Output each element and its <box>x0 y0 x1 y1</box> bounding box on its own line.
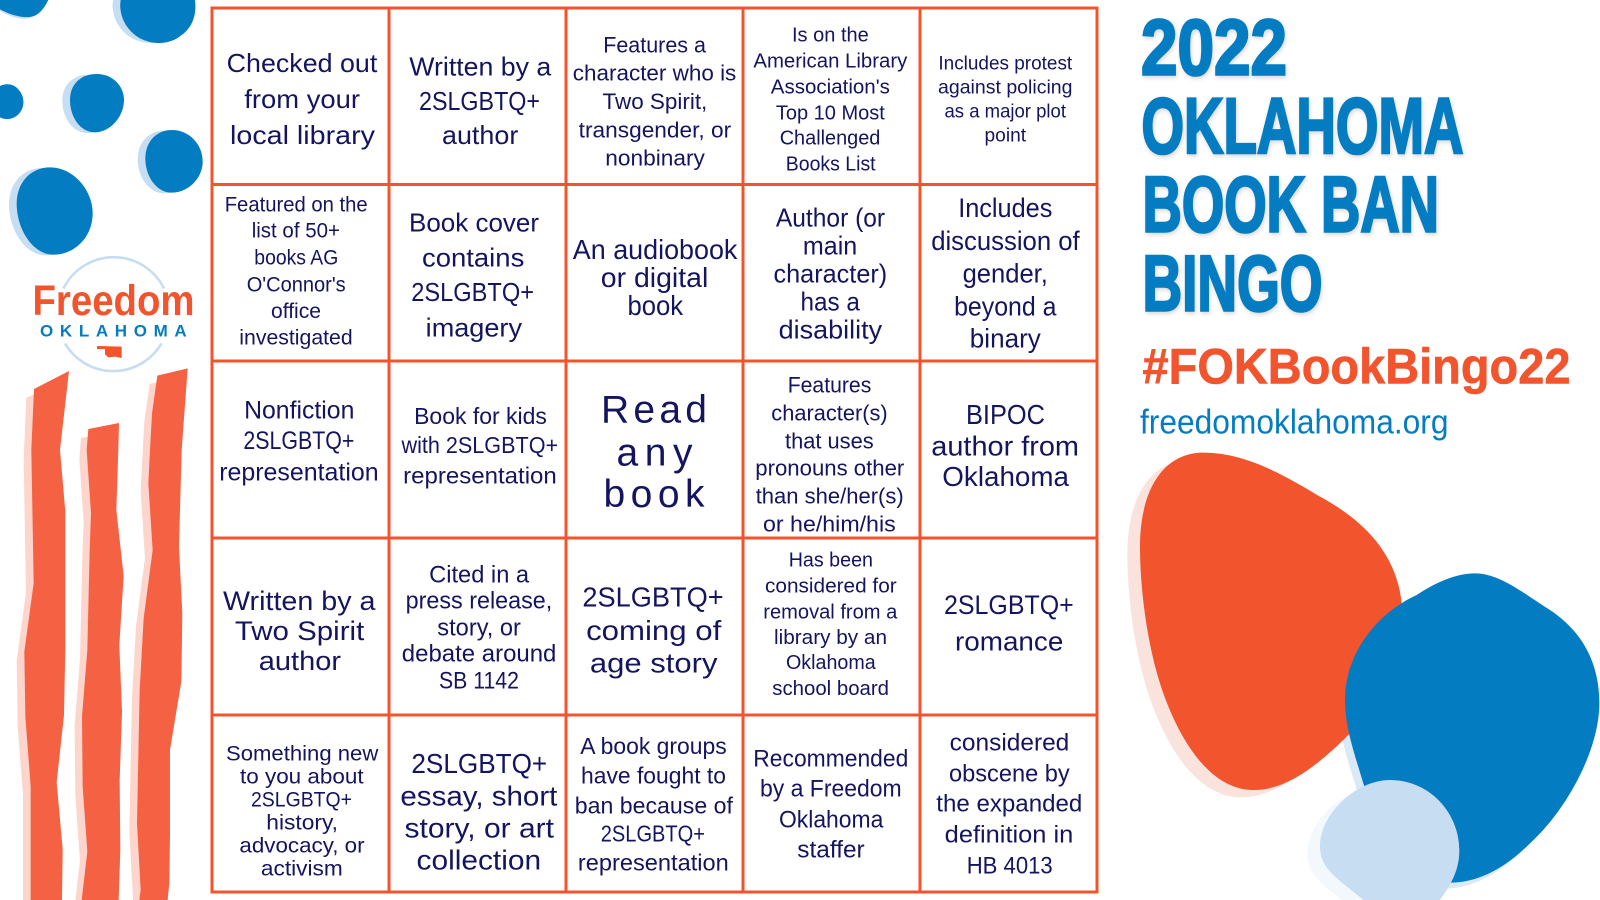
cell: HB 4013: considered <box>950 730 1069 757</box>
cell: gender beyond a binary: beyond a <box>954 291 1057 321</box>
cell: something new <box>226 741 379 880</box>
cell: disability: Author (or <box>776 203 885 233</box>
cell: ALA top 10 most challenged <box>753 24 908 175</box>
cell: recommended by staffer: Recommended <box>753 745 908 772</box>
cell: essay, short story, or art: 2SLGBTQ+ <box>411 748 547 779</box>
cell: checked out from your local library: Checked out <box>227 48 378 78</box>
cell: protest against policing: as a major plot <box>944 101 1067 123</box>
cell: AG O'Connor list: investigated <box>239 326 353 350</box>
cell: AG O'Connor list: Featured on the <box>225 193 368 217</box>
cell: school board removal: Has been <box>789 550 873 572</box>
cell: checked out from your local library: from your <box>244 84 360 114</box>
cell: HB 4013: the expanded <box>936 791 1082 818</box>
cell: disability: main <box>803 231 857 261</box>
cell: romance: romance <box>955 626 1063 656</box>
cell: written by a 2SLGBTQ+ author <box>409 51 552 150</box>
cell: SB 1142: debate around <box>402 640 556 667</box>
cell: groups fought to ban: ban because of <box>575 792 734 818</box>
cell: protest against policing: Includes protest <box>938 52 1073 74</box>
cell: coming of age: 2SLGBTQ+ <box>582 582 724 613</box>
cell: disability: has a <box>800 287 860 317</box>
cell: disability: disability <box>779 314 882 344</box>
cell: written by a 2SLGBTQ+ author: 2SLGBTQ+ <box>419 86 540 116</box>
cell: audiobook or digital book <box>573 234 738 321</box>
cell: groups fought to ban <box>575 733 734 876</box>
cell: AG O'Connor list <box>225 193 368 350</box>
cell: BIPOC author: Oklahoma <box>942 461 1070 492</box>
cell: free space, read any book: Read <box>601 388 707 431</box>
cell: audiobook or digital book: An audiobook <box>573 234 738 265</box>
cell: gender beyond a binary: gender, <box>963 259 1048 289</box>
cell: school board removal: Oklahoma <box>786 652 877 674</box>
decorative blue dots <box>0 0 203 255</box>
cell: book cover imagery <box>409 208 539 342</box>
cell: Two Spirit author: Written by a <box>223 586 377 616</box>
cell: checked out from your local library <box>227 48 378 150</box>
cell: essay, short story, or art: essay, short <box>400 780 558 812</box>
cell: written by a 2SLGBTQ+ author: Written by a <box>409 51 552 81</box>
cell: coming of age <box>582 582 724 678</box>
title <box>1141 2 1464 328</box>
cell: something new: activism <box>261 856 343 880</box>
cell: SB 1142: Cited in a <box>429 561 530 588</box>
cell: gender beyond a binary: discussion of <box>931 226 1080 256</box>
cell: pronouns <box>755 372 905 536</box>
cell: Two Spirit, transgender or nonbinary character <box>573 32 736 170</box>
cell: something new: to you about <box>240 764 364 788</box>
cell: disability: character) <box>774 259 887 289</box>
cell: book cover imagery: contains <box>422 242 524 272</box>
cell: school board removal: school board <box>772 678 889 700</box>
cell: Two Spirit, transgender or nonbinary character: nonbinary <box>605 145 706 170</box>
cell: recommended by staffer: staffer <box>797 837 865 864</box>
cell: HB 4013: HB 4013 <box>967 852 1053 879</box>
cell: pronouns: pronouns other <box>755 456 905 481</box>
cell: book cover imagery: Book cover <box>409 208 539 238</box>
cell: pronouns: or he/him/his <box>763 511 896 536</box>
cell: gender beyond a binary: binary <box>970 324 1042 354</box>
cell: romance <box>944 590 1074 656</box>
cell: pronouns: character(s) <box>771 400 888 426</box>
cell: something new: Something new <box>226 741 379 765</box>
cell: audiobook or digital book: book <box>628 290 684 321</box>
cell: HB 4013: definition in <box>945 821 1073 848</box>
decorative organic blobs <box>1127 453 1599 900</box>
cell: coming of age: coming of <box>586 615 722 646</box>
title: OKLAHOMA <box>1142 81 1464 170</box>
cell: Two Spirit author <box>223 586 377 676</box>
cell: ALA top 10 most challenged: American Library <box>753 50 908 73</box>
cell: pronouns: than she/her(s) <box>756 484 904 509</box>
cell: audiobook or digital book: or digital <box>601 262 708 293</box>
cell: book cover imagery: imagery <box>426 312 522 342</box>
cell: recommended by staffer <box>753 745 908 864</box>
title: BINGO <box>1142 238 1322 328</box>
hashtag: #FOKBookBingo22 <box>1142 338 1570 394</box>
cell: Two Spirit, transgender or nonbinary character: Features a <box>603 32 706 57</box>
cell: gender beyond a binary: Includes <box>958 193 1052 223</box>
cell: pronouns: that uses <box>785 428 874 454</box>
cell: something new: history, <box>266 810 338 834</box>
cell: disability <box>774 203 887 344</box>
cell: Two Spirit, transgender or nonbinary character: character who is <box>573 60 736 85</box>
cell: school board removal: considered for <box>765 576 897 598</box>
cell: SB 1142: SB 1142 <box>439 667 519 694</box>
cell: HB 4013 <box>936 730 1082 879</box>
cell: protest against policing <box>938 52 1073 147</box>
cell: SB 1142 <box>402 561 556 694</box>
cell: pronouns: Features <box>788 372 871 398</box>
cell: essay, short story, or art: story, or art <box>404 812 554 844</box>
cell: book cover imagery: 2SLGBTQ+ <box>411 277 534 307</box>
cell: AG O'Connor list: books AG <box>254 246 338 270</box>
cell: free space, read any book: book <box>604 473 705 516</box>
cell: school board removal: library by an <box>774 627 887 649</box>
cell: ALA top 10 most challenged: Books List <box>786 152 876 175</box>
logo: Freedom Oklahoma: Freedom <box>32 277 194 325</box>
cell: checked out from your local library: local library <box>230 120 375 150</box>
cell: something new: 2SLGBTQ+ <box>251 788 352 812</box>
cell: gender beyond a binary <box>931 193 1080 354</box>
cell: book for kids <box>401 403 558 488</box>
cell: ALA top 10 most challenged: Association's <box>771 76 890 99</box>
cell: SB 1142: story, or <box>437 614 521 641</box>
cell: Two Spirit author: author <box>259 646 341 676</box>
cell: groups fought to ban: representation <box>578 850 729 876</box>
cell: nonfiction representation: Nonfiction <box>244 396 354 424</box>
bingo card <box>210 6 1098 894</box>
cell: essay, short story, or art <box>400 748 558 876</box>
cell: book for kids: representation <box>403 462 557 488</box>
cell: something new: advocacy, or <box>239 834 365 858</box>
cell: free space, read any book: any <box>616 432 693 474</box>
cell: nonfiction representation: 2SLGBTQ+ <box>243 427 354 455</box>
cell: BIPOC author: author from <box>931 430 1079 462</box>
cell: Two Spirit, transgender or nonbinary character: Two Spirit, <box>602 89 707 114</box>
cell: nonfiction representation: representation <box>219 459 379 487</box>
cell: Two Spirit, transgender or nonbinary character: transgender, or <box>579 117 732 142</box>
cell: AG O'Connor list: O'Connor's <box>247 272 346 296</box>
cell: Two Spirit author: Two Spirit <box>235 616 365 646</box>
logo: Freedom Oklahoma: OKLAHOMA <box>40 322 187 341</box>
cell: BIPOC author: BIPOC <box>966 399 1045 430</box>
cell: book for kids: with 2SLGBTQ+ <box>401 432 558 458</box>
cell: HB 4013: obscene by <box>949 760 1070 787</box>
cell: essay, short story, or art: collection <box>416 844 541 876</box>
cell: book for kids: Book for kids <box>414 403 547 429</box>
cell: school board removal: removal from a <box>763 602 898 624</box>
cell: groups fought to ban: A book groups <box>580 733 727 759</box>
title: 2022 <box>1141 2 1287 92</box>
cell: protest against policing: against policing <box>938 77 1072 99</box>
logo: Freedom Oklahoma <box>32 257 194 371</box>
cell: SB 1142: press release, <box>406 587 552 614</box>
cell: coming of age: age story <box>590 647 718 678</box>
decorative orange ribbons <box>17 368 188 900</box>
cell: recommended by staffer: Oklahoma <box>779 807 884 834</box>
title: BOOK BAN <box>1142 160 1439 248</box>
cell: free space, read any book <box>601 388 707 516</box>
cell: ALA top 10 most challenged: Challenged <box>780 127 880 150</box>
cell: school board removal <box>763 550 898 700</box>
cell: romance: 2SLGBTQ+ <box>944 590 1074 620</box>
cell: nonfiction representation <box>219 396 379 487</box>
website: freedomoklahoma.org <box>1140 404 1448 442</box>
cell: AG O'Connor list: office <box>271 299 321 323</box>
cell: recommended by staffer: by a Freedom <box>760 775 902 802</box>
cell: ALA top 10 most challenged: Is on the <box>792 24 869 47</box>
cell: written by a 2SLGBTQ+ author: author <box>442 120 519 150</box>
cell: ALA top 10 most challenged: Top 10 Most <box>776 101 885 124</box>
cell: BIPOC author <box>931 399 1079 492</box>
cell: AG O'Connor list: list of 50+ <box>252 219 340 243</box>
cell: protest against policing: point <box>984 125 1027 147</box>
cell: groups fought to ban: 2SLGBTQ+ <box>601 821 705 847</box>
cell: groups fought to ban: have fought to <box>581 763 726 789</box>
